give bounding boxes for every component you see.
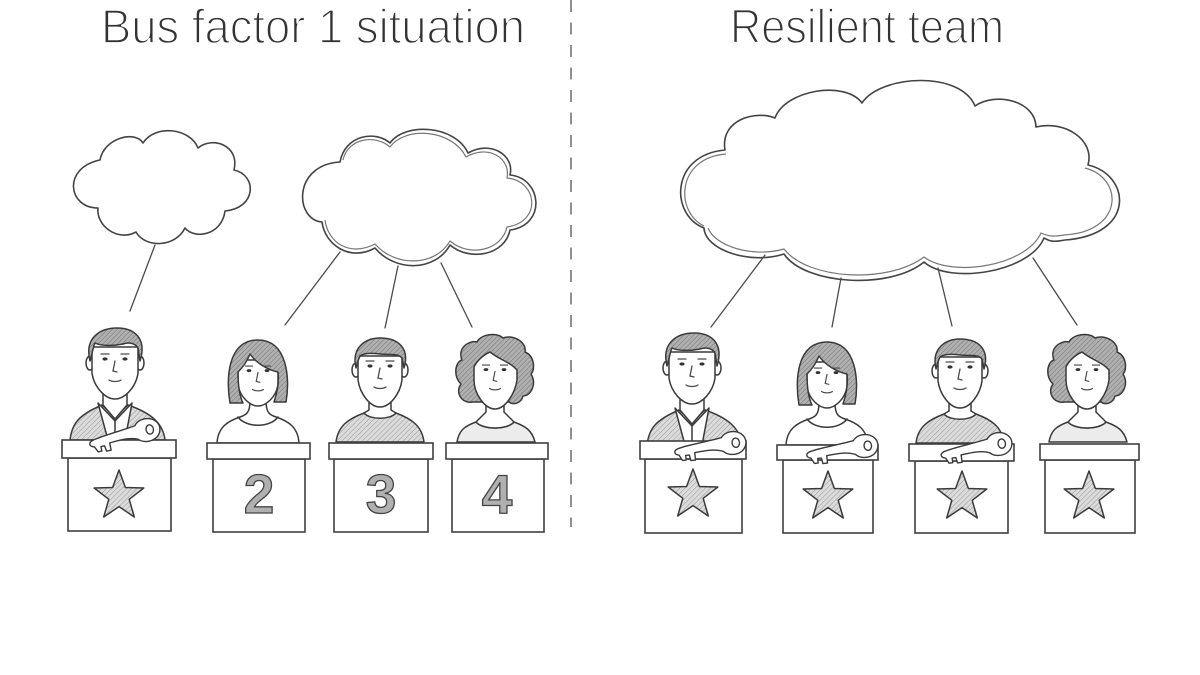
connector lines: persons 2 to 4 bbox=[285, 252, 472, 328]
person 3: man with number 3 bbox=[329, 338, 433, 532]
person 3: man with number 3: 3 bbox=[366, 463, 396, 525]
title: Resilient team: Resilient team bbox=[730, 1, 1004, 54]
person 4: curly-haired woman with number 4: 4 bbox=[482, 463, 513, 525]
person 6: woman with key and star bbox=[777, 342, 879, 533]
person 7: man with key and star bbox=[909, 339, 1014, 533]
person 4: curly-haired woman with number 4 bbox=[446, 335, 548, 532]
connector: person 1 to cloud bbox=[130, 245, 155, 311]
person 2: woman with number 2 bbox=[207, 340, 310, 532]
person 1: man with key and star bbox=[62, 328, 176, 531]
cloud: knowledge of person 1 bbox=[73, 131, 250, 244]
person 2: woman with number 2: 2 bbox=[244, 463, 274, 525]
connector lines: team to cloud bbox=[711, 255, 1077, 327]
title: Bus factor 1 situation: Bus factor 1 situation bbox=[101, 1, 525, 54]
person 5: man with key and star bbox=[640, 333, 747, 533]
cloud: shared knowledge of persons 2 to 4 bbox=[303, 129, 536, 266]
cloud: shared team knowledge bbox=[681, 80, 1120, 280]
person 8: curly-haired woman with star bbox=[1040, 335, 1139, 533]
